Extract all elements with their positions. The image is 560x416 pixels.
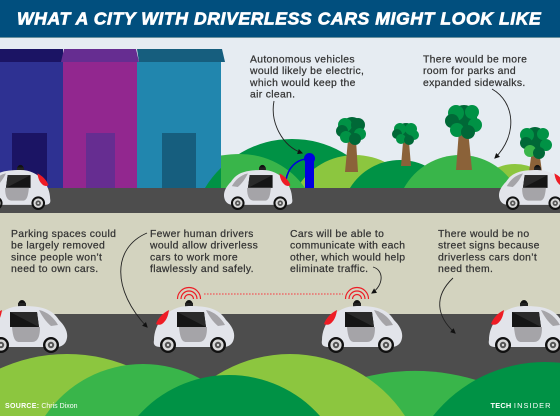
car: upper right bbox=[499, 165, 560, 210]
text: electric vehicles: would likely be electric, bbox=[249, 66, 364, 77]
arrow: to car bbox=[121, 233, 147, 327]
tree 3 bbox=[445, 105, 482, 170]
text: parks: There would be more bbox=[423, 54, 527, 66]
text: fewer drivers: flawlessly and safely. bbox=[150, 264, 254, 275]
text: communication: communicate with each bbox=[290, 241, 405, 252]
arrow: to signal bbox=[372, 267, 381, 293]
buildings bbox=[0, 49, 225, 188]
text: parking: since people won’t bbox=[11, 252, 102, 263]
text: parking: Parking spaces could bbox=[11, 229, 116, 240]
source credit: SOURCE: Chris Dixon bbox=[5, 403, 78, 410]
tree 4 bbox=[520, 127, 552, 172]
foreground hills bbox=[0, 354, 560, 416]
car: lower right bbox=[489, 300, 560, 353]
car: upper left bbox=[0, 165, 50, 210]
arrow: to park bbox=[492, 89, 511, 158]
car: upper middle bbox=[224, 165, 292, 210]
upper road bbox=[0, 188, 560, 213]
text: communication: Cars will be able to bbox=[290, 229, 384, 240]
icon: signal right bbox=[346, 288, 368, 299]
title banner bbox=[0, 0, 560, 38]
icon: electric charging post bbox=[286, 153, 315, 188]
lower road bbox=[0, 314, 560, 416]
arrow: to road bbox=[440, 278, 455, 333]
car: lower third bbox=[322, 300, 402, 353]
upper row cars bbox=[0, 165, 560, 210]
text: fewer drivers: would allow driverless bbox=[149, 241, 258, 252]
title: WHAT A CITY WITH DRIVERLESS CARS MIGHT LOOK LIKE bbox=[17, 8, 542, 28]
text: fewer drivers: Fewer human drivers bbox=[150, 229, 254, 240]
tree 2 bbox=[392, 123, 419, 166]
text: electric vehicles: air clean. bbox=[250, 90, 295, 101]
signal link between cars bbox=[178, 288, 368, 299]
background: sky bbox=[0, 38, 560, 188]
car: lower left bbox=[0, 300, 67, 353]
text: parking: be largely removed bbox=[11, 241, 105, 252]
text: street signs: need them. bbox=[438, 264, 493, 275]
background: lower beige band bbox=[0, 213, 560, 314]
text: communication: eliminate traffic. bbox=[290, 264, 368, 275]
text: street signs: driverless cars don’t bbox=[438, 252, 537, 263]
logo: Tech Insider: TECH INSIDER bbox=[490, 401, 552, 410]
text: parks: expanded sidewalks. bbox=[423, 78, 526, 89]
text: parking: need to own cars. bbox=[11, 264, 98, 275]
text: street signs: street signs because bbox=[438, 241, 540, 252]
text: communication: other, which would help bbox=[290, 252, 405, 263]
car: lower second bbox=[154, 300, 234, 353]
arrow: to charger bbox=[273, 101, 302, 153]
lower row cars bbox=[0, 300, 560, 353]
icon: signal left bbox=[178, 288, 200, 299]
upper park hills and trees bbox=[205, 105, 555, 188]
text: electric vehicles: which would keep the bbox=[249, 78, 356, 89]
text: fewer drivers: cars to work more bbox=[150, 252, 238, 263]
text: parks: room for parks and bbox=[423, 66, 516, 77]
text: electric vehicles: Autonomous vehicles bbox=[250, 54, 355, 66]
text: street signs: There would be no bbox=[438, 229, 530, 240]
tree 1 bbox=[336, 117, 366, 172]
